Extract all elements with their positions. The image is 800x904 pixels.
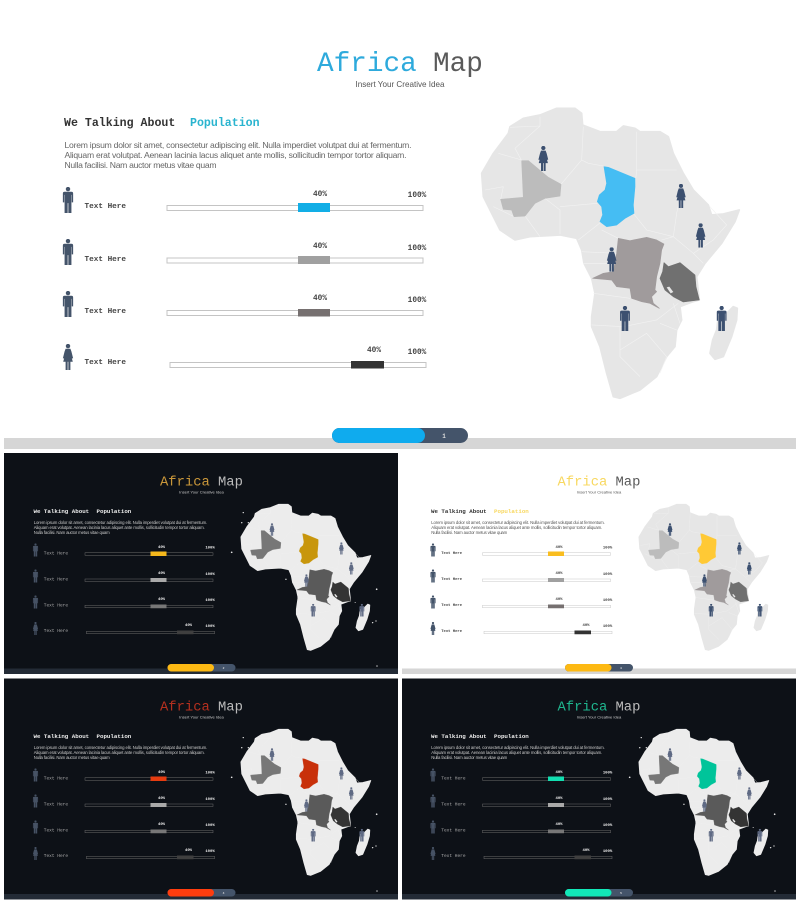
rows: 100% (603, 824, 613, 828)
subtitle: Insert Your Creative Idea (179, 714, 225, 720)
rows: 40% (158, 572, 166, 576)
rows: 40% (555, 598, 563, 602)
slide background (4, 3, 796, 449)
panel: dark slide, red (4, 678, 398, 900)
footer strip (402, 894, 796, 900)
page pill (565, 889, 633, 896)
body text: Nulla facilisi. Nam auctor metus vitae quam (34, 755, 110, 760)
rows: 100% (603, 625, 613, 629)
heading: We Talking About (431, 508, 487, 515)
page pill: 3 (620, 667, 622, 670)
rows: 40% (555, 572, 563, 576)
rows: 100% (205, 798, 215, 802)
rows: Text Here (44, 776, 68, 782)
rows: 100% (205, 824, 215, 828)
rows: Text Here (441, 630, 463, 634)
panel: main light slide, blue (4, 3, 796, 449)
slide background (4, 453, 398, 674)
rows: Text Here (44, 853, 68, 859)
body text: Aliquam erat volutpat. Aenean lacinia lacus aliquet ante mollis, sollicitudin tempor tortor aliquam. (34, 750, 205, 755)
body text: Aliquam erat volutpat. Aenean lacinia lacus aliquet ante mollis, sollicitudin tempor tortor aliquam. (34, 525, 205, 530)
body text: Nulla facilisi. Nam auctor metus vitae quam (34, 530, 110, 535)
rows: 40% (185, 624, 193, 628)
body text (34, 520, 207, 535)
row 3: 100% (408, 297, 427, 305)
row 2: 100% (408, 245, 427, 253)
panel: light slide, yellow (402, 452, 796, 674)
rows: Text Here (44, 602, 68, 608)
heading: Population (96, 733, 132, 740)
rows: Text Here (441, 776, 466, 782)
rows: 100% (205, 546, 215, 550)
heading: We Talking About (64, 117, 175, 130)
rows: 40% (555, 546, 563, 550)
title: Map (218, 474, 243, 490)
title: Africa (558, 474, 607, 490)
map of Africa (629, 729, 776, 892)
subtitle: Insert Your Creative Idea (355, 80, 445, 89)
rows: 100% (205, 625, 215, 629)
rows: 40% (158, 823, 166, 827)
slide background (402, 452, 796, 674)
title: Africa (558, 700, 607, 716)
heading: We Talking About (34, 508, 89, 515)
page pill: 5 (620, 892, 622, 895)
slide background (402, 678, 796, 900)
footer strip (402, 668, 796, 674)
heading: Population (96, 508, 132, 515)
rows: Text Here (44, 550, 68, 556)
rows: 100% (603, 573, 613, 577)
body text: Lorem ipsum dolor sit amet, consectetur adipiscing elit. Nulla imperdiet volutpat dui at fermentum. (431, 520, 605, 525)
rows (430, 543, 613, 635)
rows: Text Here (44, 628, 68, 634)
footer strip (4, 894, 398, 900)
rows: 100% (205, 599, 215, 603)
map of Africa (231, 729, 378, 892)
rows: 100% (603, 546, 613, 550)
body text: Nulla facilisi. Nam auctor metus vitae quam (64, 160, 216, 170)
subtitle: Insert Your Creative Idea (577, 490, 622, 494)
row 2: Text Here (84, 256, 126, 264)
row 1: 40% (313, 191, 327, 199)
map of Africa (231, 504, 378, 667)
rows: Text Here (44, 828, 68, 834)
row 3: Text Here (84, 308, 126, 316)
rows (33, 768, 215, 860)
row 4 (63, 344, 427, 370)
rows: 100% (205, 850, 215, 854)
page pill (565, 664, 633, 672)
row 1 (63, 187, 427, 213)
heading: We Talking About (431, 733, 487, 740)
heading: Population (494, 508, 529, 515)
page pill (332, 428, 468, 443)
title: Africa (160, 474, 210, 490)
body text: Nulla facilisi. Nam auctor metus vitae quam (431, 755, 508, 760)
rows: 100% (205, 772, 215, 776)
map of Africa (639, 504, 769, 650)
rows: 40% (158, 598, 166, 602)
page pill: 2 (223, 667, 225, 670)
rows: 40% (185, 849, 193, 853)
rows: 40% (555, 823, 563, 827)
footer strip (4, 438, 796, 449)
page pill (168, 889, 236, 896)
rows: 100% (205, 573, 215, 577)
panel: dark slide, gold (4, 453, 398, 674)
body text (64, 140, 412, 170)
row 3: 40% (313, 295, 327, 303)
row 2 (63, 239, 427, 265)
heading: Population (190, 117, 260, 130)
rows: 100% (603, 599, 613, 603)
rows: Text Here (44, 576, 68, 582)
rows: 40% (158, 546, 166, 550)
row 1: 100% (408, 192, 427, 200)
rows (430, 768, 613, 860)
page pill: 1 (442, 433, 446, 440)
rows: Text Here (441, 552, 463, 556)
body text (431, 520, 605, 535)
body text: Aliquam erat volutpat. Aenean lacinia lacus aliquet ante mollis, sollicitudin tempor tortor aliquam. (431, 750, 602, 755)
rows: 100% (603, 772, 613, 776)
row 4: Text Here (84, 359, 126, 367)
rows: 40% (582, 849, 590, 853)
body text: Lorem ipsum dolor sit amet, consectetur adipiscing elit. Nulla imperdiet volutpat dui at fermentum. (34, 520, 207, 525)
body text: Lorem ipsum dolor sit amet, consectetur adipiscing elit. Nulla imperdiet volutpat dui at fermentum. (34, 745, 207, 750)
rows: Text Here (44, 802, 68, 808)
rows: 40% (555, 797, 563, 801)
rows: 40% (555, 771, 563, 775)
body text: Aliquam erat volutpat. Aenean lacinia lacus aliquet ante mollis, sollicitudin tempor tortor aliquam. (64, 150, 406, 160)
title: Africa (160, 700, 210, 716)
panel: dark slide, teal (402, 678, 796, 900)
page pill (168, 664, 236, 672)
body text (431, 745, 605, 760)
footer strip (4, 668, 398, 674)
slide background (4, 678, 398, 900)
rows: Text Here (441, 853, 466, 859)
rows: Text Here (441, 802, 466, 808)
title: Map (616, 700, 640, 716)
row 3 (63, 291, 427, 317)
body text: Nulla facilisi. Nam auctor metus vitae quam (431, 530, 508, 535)
rows: Text Here (441, 828, 466, 834)
subtitle: Insert Your Creative Idea (577, 714, 622, 720)
rows: Text Here (441, 604, 463, 608)
map of Africa (482, 108, 739, 398)
page pill: 4 (223, 892, 225, 895)
subtitle: Insert Your Creative Idea (179, 490, 225, 494)
rows: 40% (582, 624, 590, 628)
row 4: 100% (408, 349, 427, 357)
heading: We Talking About (34, 733, 89, 740)
rows (33, 543, 215, 635)
rows: 40% (158, 797, 166, 801)
rows: 100% (603, 850, 613, 854)
rows: Text Here (441, 578, 463, 582)
body text: Aliquam erat volutpat. Aenean lacinia lacus aliquet ante mollis, sollicitudin tempor tortor aliquam. (431, 525, 602, 530)
rows: 100% (603, 798, 613, 802)
body text: Lorem ipsum dolor sit amet, consectetur adipiscing elit. Nulla imperdiet volutpat dui at fermentum. (431, 745, 605, 750)
row 4: 40% (367, 347, 381, 355)
row 2: 40% (313, 243, 327, 251)
title: Map (218, 700, 243, 716)
body text (34, 745, 207, 760)
title: Africa (317, 49, 417, 80)
title: Map (433, 49, 483, 80)
rows: 40% (158, 771, 166, 775)
heading: Population (494, 733, 529, 740)
row 1: Text Here (84, 203, 126, 211)
body text: Lorem ipsum dolor sit amet, consectetur adipiscing elit. Nulla imperdiet volutpat dui at fermentum. (64, 140, 412, 150)
title: Map (616, 474, 640, 490)
